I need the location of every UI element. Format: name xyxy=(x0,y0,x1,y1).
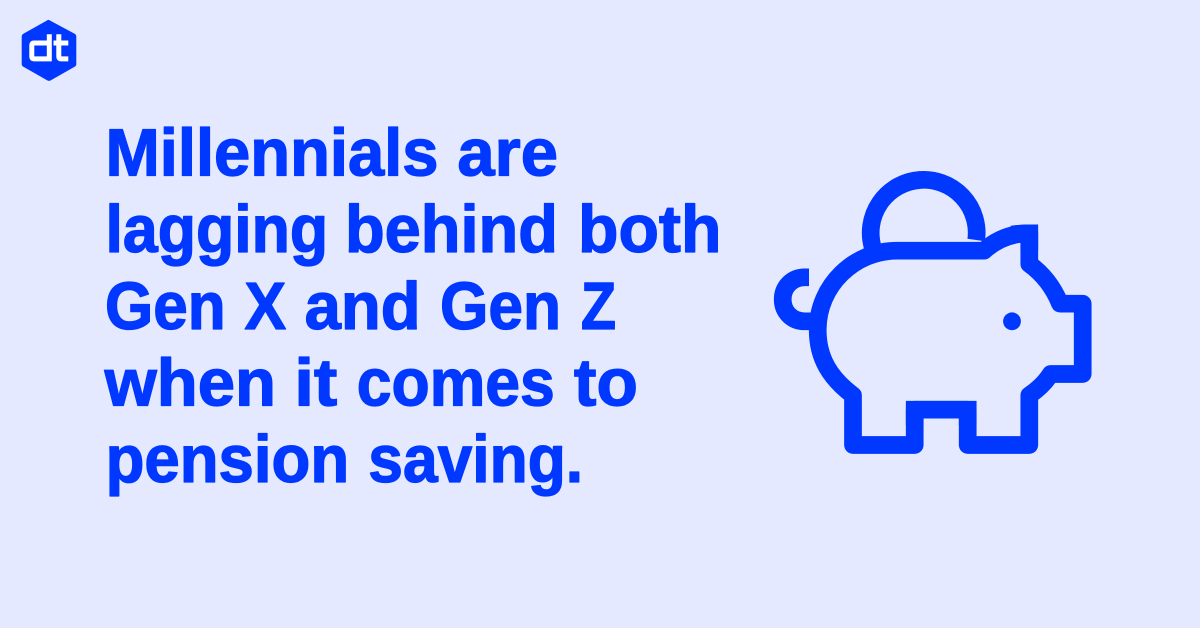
heading: when xyxy=(104,346,276,420)
heading: pension xyxy=(106,423,349,497)
heading: comes xyxy=(357,346,555,420)
icon: dt logo xyxy=(22,20,76,81)
heading: are xyxy=(457,116,558,190)
coin xyxy=(871,180,977,248)
heading: Z xyxy=(581,270,616,344)
heading: both xyxy=(578,193,721,267)
heading: and xyxy=(305,270,421,344)
pig body xyxy=(818,233,1083,445)
heading xyxy=(104,116,721,497)
eye xyxy=(1003,312,1021,330)
heading: Gen xyxy=(440,270,561,344)
heading: saving. xyxy=(368,423,583,497)
tail xyxy=(783,277,812,321)
heading: behind xyxy=(345,193,558,267)
heading: lagging xyxy=(106,193,328,267)
heading: to xyxy=(574,346,638,420)
heading: Gen xyxy=(105,270,226,344)
heading: Millennials xyxy=(106,116,438,190)
heading: it xyxy=(294,346,337,420)
heading: X xyxy=(244,270,286,344)
icon: piggy bank xyxy=(783,180,1083,445)
sharp corners of ear and belly xyxy=(915,233,1029,425)
